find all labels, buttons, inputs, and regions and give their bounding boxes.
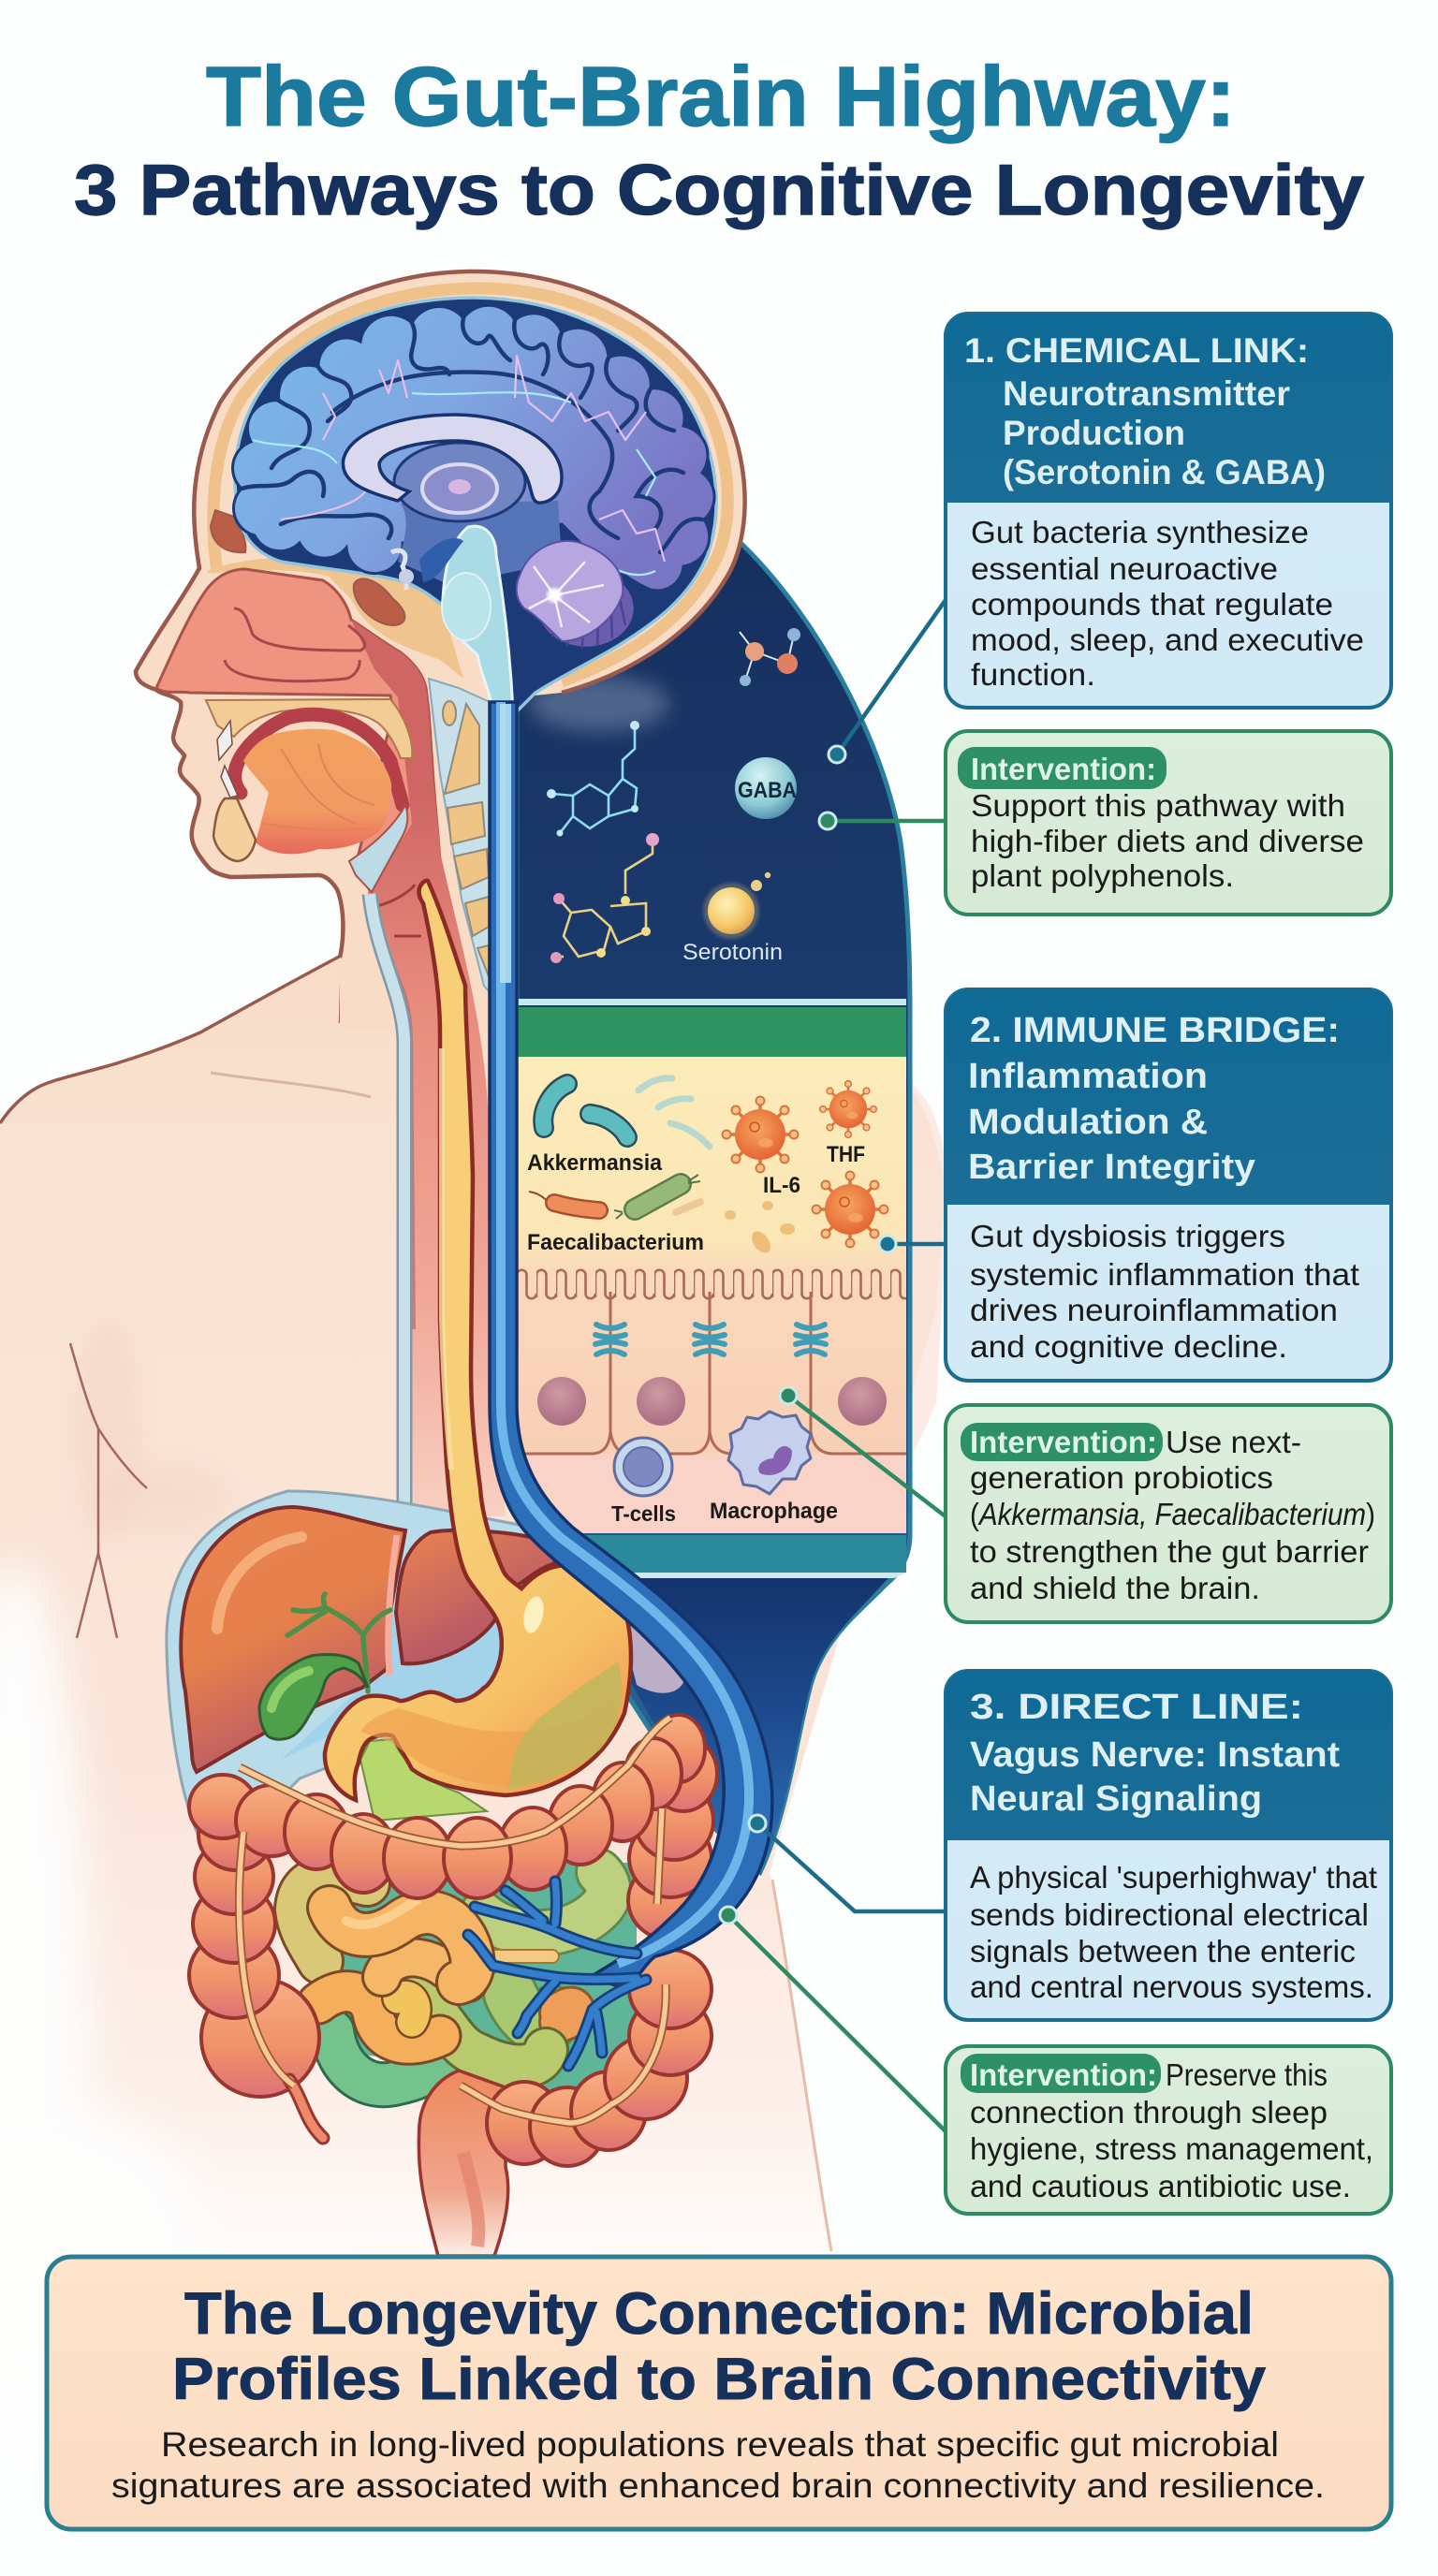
bacteria: Akkermansia [527,1078,710,1176]
section: teal band [552,1535,906,1573]
body torso [0,917,947,2462]
sigmoid and rectum [418,2071,508,2256]
pancreas [360,1739,487,1821]
panel: longevity connection: Profiles Linked to Brain Connectivity [172,2347,1266,2412]
central region [398,501,562,585]
vertebrae [443,701,489,976]
panel: intervention 3: and cautious antibiotic use. [970,2169,1351,2203]
connector 4 [788,1396,950,1520]
section: green band [517,999,906,1005]
panel: card 1 chemical link: essential neuroactive [971,551,1278,586]
title: The Gut-Brain Highway: [206,51,1236,144]
panel: intervention 3: connection through sleep [970,2095,1328,2130]
panel: card 2 immune bridge: 2. IMMUNE BRIDGE: [970,1011,1340,1050]
descending colon and sigmoid [487,2082,562,2164]
sinuses [211,510,245,552]
panel: intervention 1: Support this pathway with [971,788,1345,823]
bile ducts [287,1594,390,1691]
brain [233,298,716,711]
panel: intervention 3: Intervention: [970,2057,1157,2092]
panel: intervention 2: Use next- [1166,1425,1301,1459]
panel: intervention 2: to strengthen the gut barrier [970,1534,1369,1569]
brain cavity [235,298,716,711]
panel: card 1 chemical link: function. [971,657,1095,692]
cortex [233,305,714,591]
panel: card 1 chemical link: compounds that regulate [971,587,1333,622]
cytokines [723,1081,888,1256]
trachea sleeve [370,894,404,1503]
panel: gut-brain capsule [517,534,910,1872]
T-cell [611,1438,676,1526]
panel: intervention 2 [946,1405,1391,1622]
panel: card 1 chemical link: 1. CHEMICAL LINK: [964,331,1309,370]
molecule: serotonin: Serotonin [682,940,783,965]
skull base bone [208,557,463,679]
panel: intervention 3 [946,2046,1391,2214]
colon bands [239,1718,670,2123]
bacteria: Akkermansia: Akkermansia [527,1150,663,1176]
teeth [217,721,238,798]
panel: longevity connection: Research in long-lived populations reveals that specific gut microbial [161,2425,1279,2464]
cerebellum [517,541,635,648]
molecule: top [740,628,800,686]
panel: intervention 2: generation probiotics [970,1460,1273,1495]
tongue [243,729,391,854]
panel: card 1 chemical link: Production [1003,414,1185,452]
molecule: serotonin [682,872,783,965]
corpus callosum [343,415,562,503]
appendix [289,2080,323,2138]
macrophage: Macrophage [710,1499,838,1524]
panel: card 3 direct line: Vagus Nerve: Instant [970,1735,1340,1775]
panel: intervention 3: Preserve this [1166,2057,1328,2092]
title [74,51,1364,230]
pale column [429,679,490,992]
cytokines: THF [827,1142,865,1167]
panel: card 1 chemical link: mood, sleep, and executive [971,622,1364,657]
panel: card 3 direct line: sends bidirectional electrical [970,1897,1369,1932]
panel: card 2 immune bridge: Modulation & [968,1103,1208,1142]
bacteria: Faecalibacterium: Faecalibacterium [527,1230,704,1255]
liver right lobe [396,1530,555,1663]
panel: card 2 immune bridge: systemic inflammation that [970,1257,1359,1292]
spleen [618,1610,685,1693]
nerve branches [468,1881,646,2066]
brain stem [443,526,513,711]
bacteria: Faecalibacterium [527,1175,704,1255]
panel: card 3 direct line: A physical 'superhighway' that [970,1860,1377,1895]
callout connector lines [720,600,950,2131]
T-cell: T-cells [611,1501,676,1526]
neural sparks [253,356,665,575]
panel: card 3 direct line: signals between the enteric [970,1934,1356,1969]
section: navy funnel [517,1576,889,1872]
panel: card 1 chemical link: Gut bacteria synthesize [971,515,1309,549]
molecule: GABA: GABA [738,778,797,803]
skull bone layer [213,288,727,681]
panel: longevity connection [47,2257,1391,2529]
transverse colon [653,1715,705,1782]
panel: longevity connection: The Longevity Connection: Microbial [184,2281,1254,2347]
panel: card 3 direct line: 3. DIRECT LINE: [970,1688,1303,1727]
connector 3 [888,1242,946,1246]
stomach and esophagus [325,881,631,1800]
throat tissue [351,620,506,1516]
liver left lobe [181,1507,405,1772]
connector 5 [757,1823,946,1911]
panel: card 2 immune bridge: Inflammation [968,1057,1208,1096]
panel: card 2 immune bridge: and cognitive decline. [970,1329,1287,1364]
liver region [167,1491,685,1863]
panel: intervention 2: and shield the brain. [970,1571,1260,1605]
panel: card 2 immune bridge: drives neuroinflammation [970,1293,1338,1327]
midbrain blue [419,538,463,582]
panel: intervention 2: (Akkermansia, Faecalibacterium) [970,1497,1375,1531]
panel: card 1 chemical link: (Serotonin & GABA) [1003,453,1326,491]
nasal cavity [156,569,442,936]
panel: card 1 chemical link [946,314,1391,708]
panel: longevity connection: signatures are associated with enhanced brain connectivity and resilience. [111,2466,1325,2505]
palate bone [206,699,412,758]
panel: intervention 2: Intervention: [970,1425,1157,1459]
panel: card 3 direct line: and central nervous systems. [970,1969,1373,2004]
mouth [235,714,403,805]
macrophage [710,1412,838,1524]
connector 6 [728,1915,946,2131]
molecule: indole [547,721,639,837]
panel: card 2 immune bridge [946,989,1391,1381]
head and neck [136,271,745,1516]
panel: intervention 1: plant polyphenols. [971,858,1234,893]
panel: intervention 1: Intervention: [971,752,1156,786]
section: mucus and epithelium [517,1057,906,1533]
panel: card 3 direct line: Neural Signaling [970,1779,1262,1819]
title: 3 Pathways to Cognitive Longevity [74,151,1364,230]
connector 2 [828,819,946,823]
vagus nerve [468,702,772,2066]
epithelium cells [517,1267,906,1454]
panel: card 2 immune bridge: Gut dysbiosis triggers [970,1219,1285,1253]
cytokines: IL-6 [763,1173,800,1198]
gallbladder [259,1654,368,1739]
panel: card 3 direct line [946,1671,1391,2020]
panel: card 2 immune bridge: Barrier Integrity [968,1148,1255,1187]
small intestines [298,1863,637,2097]
molecule: GABA [735,757,797,819]
connector 1 [837,600,946,754]
ascending colon [201,1979,319,2097]
molecule: serotonin structure [550,833,659,963]
epiglottis [349,805,407,892]
panel: intervention 3: hygiene, stress management, [970,2131,1373,2166]
panel: intervention 1: high-fiber diets and diverse [971,824,1364,858]
colon [189,1715,717,2256]
panel: intervention 1 [946,731,1391,915]
panel: card 1 chemical link: Neurotransmitter [1003,374,1290,413]
jaw bone [213,798,256,861]
sulci [242,318,702,552]
